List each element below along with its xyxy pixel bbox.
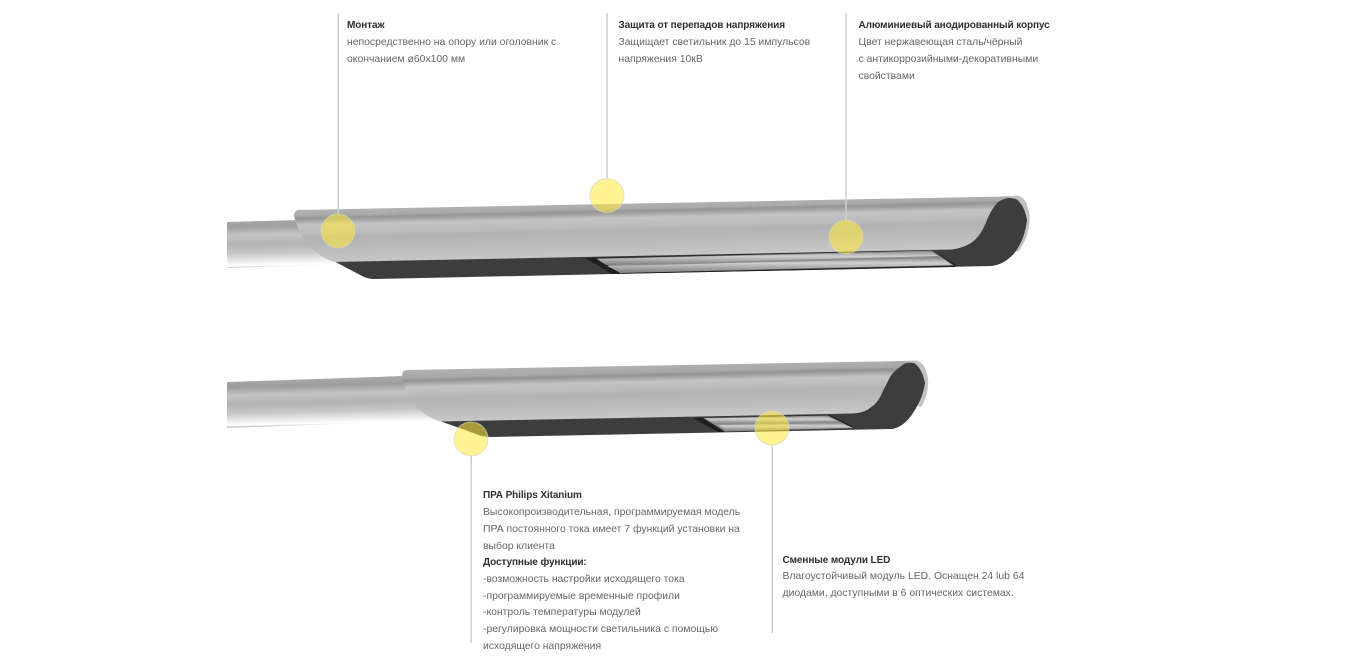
text block: mounting [347, 20, 556, 65]
text block: driver: -программируемые временные профили [483, 590, 680, 602]
text block: driver: ПРА постоянного тока имеет 7 функций установки на [483, 523, 740, 535]
dark underside: upper luminaire [330, 198, 1027, 279]
silver housing: lower luminaire [402, 361, 910, 422]
text block: mounting: Монтаж [347, 20, 385, 31]
text block: driver: -регулировка мощности светильника с помощью [483, 624, 718, 635]
text block: driver: выбор клиента [483, 540, 555, 552]
LED lens: lower luminaire [693, 415, 855, 432]
text block: housing [858, 20, 1050, 82]
leader line: housing [845, 13, 847, 220]
text block: surge protection: напряжения 10кВ [618, 54, 703, 65]
pole: upper luminaire [227, 220, 340, 268]
text block: driver [483, 490, 740, 652]
text block: housing: Алюминиевый анодированный корпус [858, 20, 1050, 31]
marker: mounting [321, 214, 355, 248]
text block: housing: с антикоррозийными-декоративными [858, 54, 1038, 65]
text block: mounting: непосредственно на опору или оголовник с [347, 37, 556, 48]
illustration: upper luminaire [227, 196, 1030, 279]
text block: driver: ПРА Philips Xitanium [483, 490, 582, 501]
text block: surge protection: Защищает светильник до 15 импульсов [618, 37, 811, 48]
LED lens: upper luminaire [585, 250, 956, 274]
text block: driver: -возможность настройки исходящего тока [483, 574, 685, 585]
leader line: mounting [338, 13, 339, 214]
pole: lower luminaire [227, 376, 445, 428]
text block: driver: исходящего напряжения [483, 641, 601, 652]
silver housing: upper luminaire [294, 196, 1012, 262]
text block: LED modules: Влагоустойчивый модуль LED. Оснащен 24 lub 64 [782, 571, 1025, 582]
dark underside: lower luminaire [437, 363, 925, 437]
text block: LED modules: Сменные модули LED [782, 555, 890, 566]
marker: LED modules [755, 411, 789, 445]
leader line: driver [470, 456, 472, 643]
text block: LED modules: диодами, доступными в 6 оптических системах. [782, 588, 1014, 599]
marker: driver [454, 422, 488, 456]
text block: surge protection: Защита от перепадов напряжения [618, 20, 785, 31]
rim: lower luminaire [900, 360, 928, 407]
text block: LED modules [782, 555, 1025, 599]
text block: surge protection [618, 20, 811, 65]
leader line: surge protection [606, 13, 608, 178]
rim: upper luminaire [1000, 196, 1030, 252]
leader line: LED modules [772, 445, 773, 633]
marker: housing [829, 220, 863, 254]
text block: housing: свойствами [858, 71, 915, 82]
text block: driver: Доступные функции: [483, 556, 587, 568]
marker: surge protection [590, 178, 624, 212]
text block: housing: Цвет нержавеющая сталь/чёрный [858, 37, 1023, 48]
text block: driver: -контроль температуры модулей [483, 607, 641, 618]
text block: driver: Высокопроизводительная, программируемая модель [483, 507, 740, 518]
illustration: lower luminaire [227, 360, 928, 437]
text block: mounting: окончанием ø60х100 мм [347, 54, 465, 65]
